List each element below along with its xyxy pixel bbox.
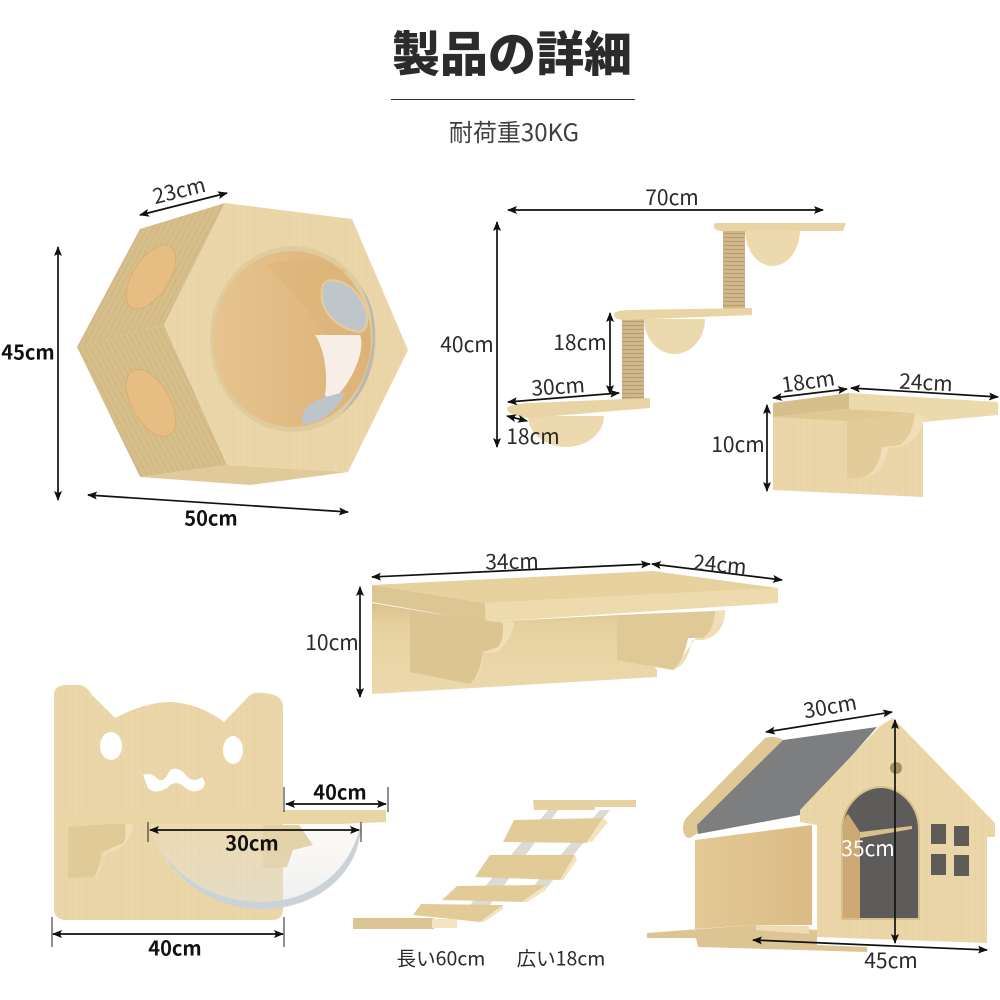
label: length 60cm: 長い60cm [397, 942, 485, 972]
hexagon front face [164, 203, 408, 472]
dimension: 18cm corner depth: 18cm [779, 362, 837, 400]
dimension: 10cm corner height: 10cm [711, 429, 765, 459]
bracket right [673, 610, 725, 670]
floor strip [756, 925, 809, 934]
hexagon side face [77, 203, 225, 347]
dimension: 30cm bowl [148, 822, 361, 856]
dimension: 24cm corner width [851, 366, 998, 398]
dimension: 10cm long shelf [305, 587, 360, 697]
bracket right [263, 825, 313, 868]
door [842, 787, 919, 919]
dimension: 23cm: 23cm [149, 169, 209, 211]
subtitle: load capacity: 耐荷重30KG [449, 113, 579, 148]
acrylic bowl [150, 822, 361, 909]
panel: hexagon bubble house [77, 203, 408, 485]
title: 製品の詳細 [392, 15, 632, 85]
step 2 [503, 818, 603, 843]
dimension: 45cm width: 45cm [864, 945, 918, 975]
window [931, 824, 969, 876]
dimension: 40cm panel width [52, 917, 284, 962]
panel: long shelf [372, 571, 778, 694]
dimension: 40cm panel width: 40cm [148, 932, 202, 962]
step 5 [413, 904, 503, 922]
panel: ladder bridge [353, 800, 636, 929]
panel: corner shelf [773, 393, 998, 497]
top step [533, 800, 636, 810]
shelf board [58, 810, 386, 824]
dimension: 30cm bowl: 30cm [225, 828, 279, 856]
back panel [372, 603, 657, 694]
panel: cat house [647, 718, 995, 952]
dimension: 18cm post [553, 313, 610, 394]
dimension: 40cm shelf depth: 40cm [313, 776, 367, 806]
dimension: 50cm: 50cm [184, 502, 238, 532]
dimension: 23cm [140, 169, 227, 215]
left board edge [773, 393, 849, 417]
bracket left [93, 823, 133, 877]
cat back panel [54, 685, 283, 920]
grey roof [697, 727, 877, 834]
back panel [773, 415, 923, 497]
panel: three-step post shelves [507, 223, 846, 447]
step 6 [353, 918, 434, 929]
middle board [614, 308, 752, 320]
dimension: 45cm width [753, 940, 987, 975]
semicircle brackets [528, 230, 800, 447]
post lower [622, 319, 644, 401]
roof wood edge [683, 737, 783, 838]
dimension: 18cm depth: 18cm [506, 421, 560, 451]
dimension: 34cm [372, 546, 650, 577]
dimension: 34cm: 34cm [485, 546, 539, 576]
dimension: 30cm [508, 369, 619, 403]
dimension: 30cm roof: 30cm [801, 687, 859, 725]
top board [714, 223, 846, 231]
dimension: 24cm corner width: 24cm [899, 366, 953, 398]
dimension: 24cm long shelf [652, 547, 782, 581]
acrylic bubble [210, 246, 376, 432]
step 3 [475, 855, 575, 880]
dimension: 10cm long shelf: 10cm [305, 627, 359, 657]
side wall [695, 825, 812, 929]
dimension: 30cm: 30cm [530, 369, 586, 403]
dimension: 40cm shelf depth [284, 776, 388, 812]
label: width 18cm: 広い18cm [517, 942, 605, 972]
step 4 [442, 885, 546, 902]
dimension: 30cm roof [766, 687, 892, 732]
bottom board [507, 398, 650, 418]
right board surface [849, 393, 998, 422]
dimension: 50cm [88, 495, 348, 532]
dimension: 35cm height: 35cm [841, 833, 895, 863]
dimension: 24cm long shelf: 24cm [692, 547, 748, 581]
ladder straps [470, 810, 610, 905]
dimension: 40cm height: 40cm [440, 329, 494, 359]
dimension: 10cm corner height [711, 405, 767, 491]
panel: cat face bubble shelf [54, 685, 386, 920]
bracket [847, 413, 924, 478]
vent hole [890, 762, 902, 774]
bracket left [460, 621, 514, 684]
cat eyes and mustache [100, 732, 243, 792]
dimension: 18cm post: 18cm [553, 327, 607, 357]
dimension: 70cm: 70cm [645, 182, 699, 212]
top surface [372, 571, 778, 603]
post upper [723, 230, 745, 310]
house front [800, 718, 995, 943]
floor board [647, 925, 867, 952]
side holes [116, 237, 186, 445]
dimension: 45cm: 45cm [1, 336, 55, 366]
underside strip [773, 409, 915, 421]
